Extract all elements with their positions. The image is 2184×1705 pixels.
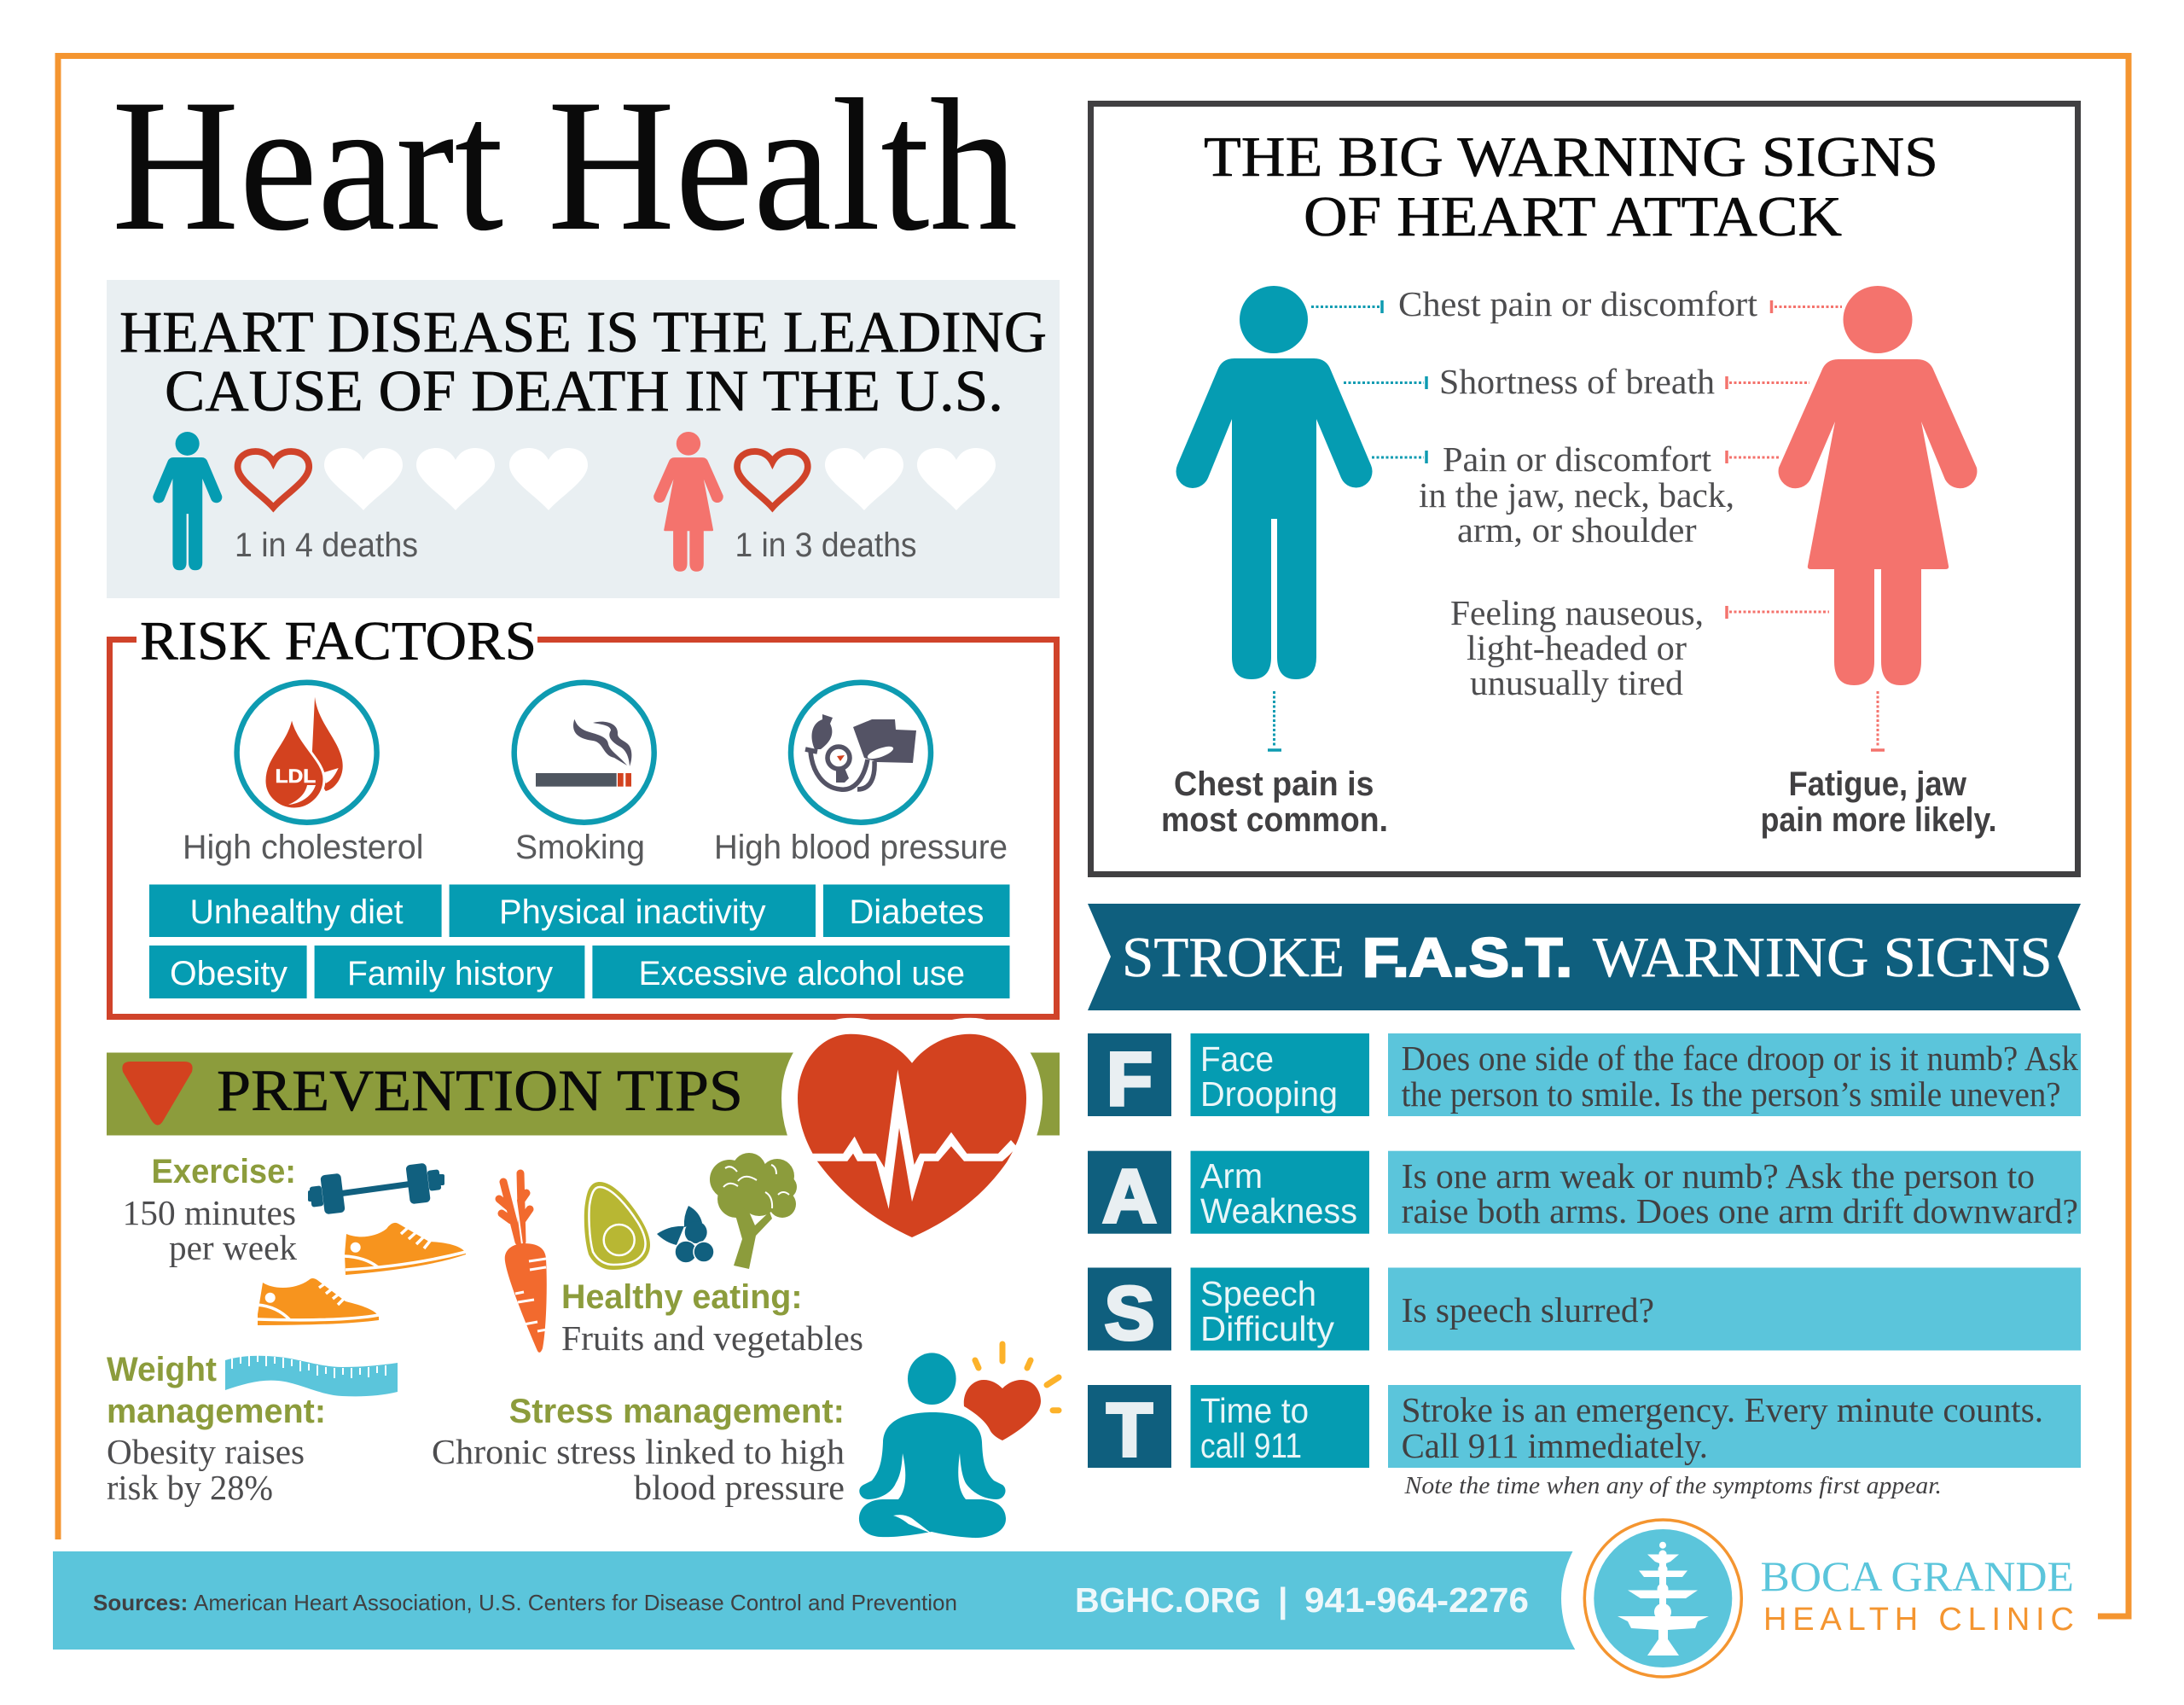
icon: meditating person with heart	[859, 1344, 1059, 1538]
icon: cigarette	[514, 683, 654, 823]
heading: big warning signs: OF HEART ATTACK	[1304, 185, 1842, 248]
tip: weight management text: Weight	[107, 1351, 217, 1388]
symptoms list: arm, or shoulder	[1457, 510, 1697, 550]
symptom leader lines: man	[1268, 300, 1426, 750]
symptom leader lines: woman	[1727, 300, 1885, 750]
row: S speech difficulty: S	[1105, 1271, 1154, 1355]
risk factor tags: Excessive alcohol use	[639, 955, 965, 992]
tip: weight management text: management:	[107, 1393, 326, 1430]
row: A arm weakness: Is one arm weak or numb? Ask the person to	[1402, 1156, 2035, 1196]
sources: Sources:	[93, 1590, 188, 1615]
tip: healthy eating text: Fruits and vegetables	[561, 1318, 863, 1358]
icon: broccoli	[710, 1153, 797, 1269]
logo: clinic name	[1761, 1552, 2074, 1638]
footer band	[53, 1497, 1764, 1700]
row: T time to call 911: Stroke is an emergency. Every minute counts.	[1402, 1390, 2043, 1429]
row: T time to call 911	[1088, 1385, 2081, 1472]
heading: risk factors: RISK FACTORS	[140, 611, 537, 672]
row: F face drooping: Does one side of the face droop or is it numb? Ask	[1402, 1039, 2078, 1078]
tip: exercise text: 150 minutes	[123, 1193, 296, 1232]
risk factor tags: Physical inactivity	[499, 893, 766, 931]
tip: weight management text: risk by 28%	[107, 1468, 273, 1507]
row: F face drooping	[1088, 1033, 2081, 1121]
contact info: |	[1278, 1580, 1287, 1620]
panel: prevention tips	[107, 1034, 1060, 1538]
symptoms list: Shortness of breath	[1439, 362, 1715, 401]
icon: dumbbell	[308, 1163, 444, 1214]
icon: avocado	[584, 1182, 650, 1270]
heading: big warning signs	[1204, 125, 1938, 248]
logo: clinic name: BOCA GRANDE	[1761, 1552, 2074, 1600]
row: S speech difficulty: Difficulty	[1200, 1309, 1335, 1348]
icon: woman figure small	[653, 432, 723, 572]
risk factor tags	[149, 884, 1010, 998]
row: A arm weakness	[1088, 1151, 2081, 1238]
contact info	[1075, 1580, 1529, 1620]
logo: clinic name: HEALTH CLINIC	[1763, 1602, 2074, 1638]
tip: weight management text: Obesity raises	[107, 1432, 305, 1471]
row: T time to call 911: call 911	[1200, 1426, 1302, 1465]
heading: big warning signs: THE BIG WARNING SIGNS	[1204, 125, 1938, 189]
tip: stress management text: Stress management:	[509, 1393, 845, 1430]
prevention banner	[107, 1053, 1060, 1135]
row: S speech difficulty: Is speech slurred?	[1402, 1290, 1654, 1330]
icon: LDL cholesterol drops: LDL	[276, 765, 316, 787]
row: T time to call 911: T	[1107, 1388, 1153, 1472]
panel: stroke FAST	[1088, 904, 2081, 1499]
icon: man figure small	[153, 432, 222, 570]
risk factor tags: Obesity	[170, 955, 288, 992]
tip: stress management text: Chronic stress linked to high	[432, 1432, 845, 1471]
heading: leading cause: HEART DISEASE IS THE LEADING	[119, 300, 1047, 364]
tip: exercise text	[123, 1153, 297, 1267]
risk factor tags: Unhealthy diet	[190, 893, 404, 931]
icon: men hearts 1 in 4	[237, 448, 588, 510]
panel: risk factors	[109, 611, 1056, 1017]
row: A arm weakness: Weakness	[1200, 1191, 1357, 1231]
label: high blood pressure: High blood pressure	[714, 829, 1008, 866]
tip: healthy eating text	[561, 1278, 863, 1358]
logo: fountain emblem	[1584, 1520, 1741, 1677]
row: F face drooping: Face	[1200, 1039, 1274, 1079]
panel: heart attack warning signs	[1090, 104, 2078, 874]
row: S speech difficulty: Speech	[1200, 1274, 1316, 1313]
row: A arm weakness: raise both arms. Does one arm drift downward?	[1402, 1191, 2078, 1231]
sources list: American Heart Association, U.S. Centers for Disease Control and Prevention	[194, 1590, 957, 1615]
symptoms list: Feeling nauseous,	[1450, 593, 1704, 632]
symptoms list: Chest pain or discomfort	[1398, 284, 1758, 323]
caption: women	[1761, 765, 1997, 839]
label: smoking: Smoking	[515, 829, 645, 866]
heading: prevention tips: PREVENTION TIPS	[217, 1058, 743, 1123]
symptoms list: in the jaw, neck, back,	[1419, 475, 1734, 515]
stat: 1 in 3 deaths: 1 in 3 deaths	[735, 527, 916, 564]
tip: healthy eating text: Healthy eating:	[561, 1278, 802, 1316]
label: high cholesterol: High cholesterol	[183, 829, 423, 866]
caption: men: most common.	[1161, 801, 1388, 839]
symptoms list	[1398, 284, 1758, 702]
icon: women hearts 1 in 3	[737, 448, 996, 510]
title: Heart Health	[112, 61, 1018, 271]
stat: 1 in 4 deaths: 1 in 4 deaths	[235, 527, 418, 564]
row: F face drooping: F	[1107, 1037, 1153, 1121]
contact info: 941-964-2276	[1304, 1580, 1529, 1620]
risk factor tags: Diabetes	[849, 893, 984, 931]
heading: leading cause: CAUSE OF DEATH IN THE U.S.	[165, 358, 1003, 423]
icon: blueberries	[657, 1206, 714, 1263]
heading: leading cause	[119, 300, 1047, 423]
icon: LDL cholesterol drops	[237, 683, 377, 823]
caption: women: pain more likely.	[1761, 801, 1997, 839]
note: Note the time when any of the symptoms first appear.	[1403, 1473, 1942, 1499]
tip: stress management text	[432, 1393, 845, 1507]
row: F face drooping: Drooping	[1200, 1074, 1338, 1114]
banner: stroke fast heading: STROKE	[1122, 926, 1345, 989]
panel: leading cause of death	[107, 280, 1060, 598]
contact info: BGHC.ORG	[1075, 1580, 1261, 1620]
row: F face drooping: the person to smile. Is the person’s smile uneven?	[1402, 1074, 2061, 1114]
icon: red pointer	[122, 1062, 193, 1125]
tip: weight management text	[107, 1351, 326, 1507]
icon: blood pressure cuff	[791, 683, 931, 823]
row: T time to call 911: Time to	[1200, 1391, 1309, 1430]
banner: stroke fast heading: WARNING SIGNS	[1593, 926, 2053, 989]
row: A arm weakness: A	[1102, 1154, 1157, 1238]
row: S speech difficulty	[1088, 1268, 2081, 1355]
icon: tape measure	[225, 1355, 398, 1396]
figure: woman	[1779, 286, 1977, 685]
symptoms list: light-headed or	[1467, 628, 1687, 667]
figure: man	[1176, 286, 1373, 679]
risk factor tags: Family history	[347, 955, 553, 992]
row: A arm weakness: Arm	[1200, 1156, 1263, 1196]
symptoms list: Pain or discomfort	[1443, 439, 1712, 479]
tip: exercise text: Exercise:	[152, 1153, 296, 1190]
row: T time to call 911: Call 911 immediately.	[1402, 1426, 1708, 1465]
icon: running shoe upper	[344, 1223, 466, 1275]
icon: heart with pulse line	[798, 1034, 1026, 1237]
caption: men	[1161, 765, 1388, 839]
banner: stroke fast heading: F.A.S.T.	[1362, 927, 1572, 988]
symptoms list: unusually tired	[1470, 663, 1683, 702]
caption: women: Fatigue, jaw	[1788, 765, 1967, 803]
icon: running shoe lower	[258, 1278, 379, 1325]
tip: stress management text: blood pressure	[634, 1468, 845, 1507]
caption: men: Chest pain is	[1174, 765, 1374, 803]
banner: stroke fast heading	[1088, 904, 2081, 1010]
icon: carrot	[499, 1173, 547, 1353]
tip: exercise text: per week	[169, 1228, 297, 1267]
